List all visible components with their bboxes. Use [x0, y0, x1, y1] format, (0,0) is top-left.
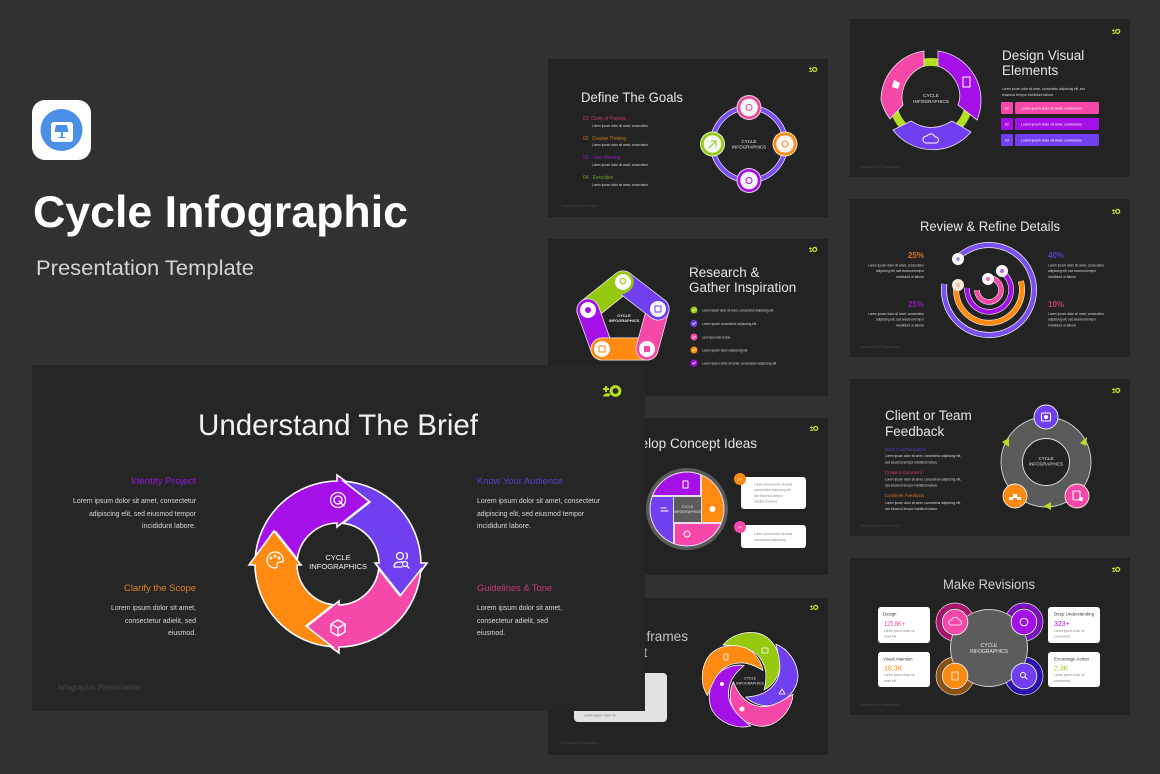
segmented ring	[881, 51, 981, 150]
list of four goals: Creative Thinking	[592, 136, 626, 142]
card: Design: amet elit	[884, 634, 896, 638]
heading: & Layout	[594, 645, 648, 660]
ring icons and label	[892, 77, 970, 143]
card: Encourage Action: Lorem ipsum dolor sit	[1054, 673, 1085, 677]
text block: Identity Project: Identity Project	[131, 476, 196, 487]
list of four goals: Execution	[593, 175, 613, 181]
heading: Design Visual	[1002, 48, 1084, 63]
feedback list: sed eiusmod tempor incididunt labore.	[885, 507, 938, 511]
stat: 25% purple: Lorem ipsum dolor sit amet, consectetur	[868, 312, 925, 316]
three coloured rows: 02	[1005, 122, 1009, 126]
card: Deep Understanding: consectetur	[1054, 634, 1071, 638]
card: Deep Understanding: 323+	[1054, 621, 1070, 628]
heading: Feedback	[885, 424, 945, 439]
card: Visual Attention: amet elit	[884, 679, 896, 683]
list of four goals: 02	[583, 136, 589, 142]
stat: 25% purple	[868, 300, 925, 328]
pentagon cycle	[588, 282, 658, 349]
feedback list: Create a Document	[885, 470, 923, 475]
paragraph	[1002, 87, 1085, 97]
feedback list: sed eiusmod tempor incididunt labore.	[885, 484, 938, 488]
card: Deep Understanding: Lorem ipsum dolor sit	[1054, 629, 1085, 633]
paragraph: Lorem ipsum dolor sit amet, consectetur adipiscing elit, sed	[1002, 87, 1085, 91]
text block: Know Your Audience: Lorem ipsum dolor sit amet, consectetur	[477, 496, 600, 505]
card 01: incididunt labore	[754, 500, 777, 504]
text block: Clarify the Scope: Clarify the Scope	[124, 583, 196, 594]
ring icons and label: CYCLE	[923, 93, 939, 98]
donut diagram: CYCLE	[1038, 456, 1054, 461]
icon: palette	[267, 552, 283, 568]
pinwheel circle: CYCLE	[682, 505, 694, 509]
feedback list: Work Communication	[885, 447, 926, 452]
panel: Client or Team Feedback	[850, 379, 1130, 536]
heading: Elements	[1002, 63, 1059, 78]
pinwheel circle: INFOGRAPHICS	[674, 510, 701, 514]
stat: 40% violet: incididunt ut labore	[1048, 275, 1076, 279]
concentric arcs	[944, 245, 1034, 335]
logo	[603, 386, 620, 396]
text block: Guidelines & Tone: eiusmod.	[477, 628, 505, 637]
arc nodes	[952, 253, 1008, 291]
stat: 25% purple: adipiscing elit, sed eiusmod tempor	[876, 318, 925, 322]
heading: Gather Inspiration	[689, 280, 796, 295]
text block: Identity Project: incididunt labore.	[142, 521, 196, 530]
text block: Clarify the Scope: eiusmod.	[168, 628, 196, 637]
paragraph: eiusmod tempor incididunt labore.	[1002, 93, 1054, 97]
list of four goals: Lorem ipsum dolor sit amet, consectetur	[592, 124, 649, 128]
heading: Develop Concept Ideas	[617, 436, 757, 451]
panel: Develop Concept Ideas	[645, 418, 828, 575]
heading: Make Revisions	[943, 577, 1035, 592]
text block: Identity Project: adipiscing elit, sed eiusmod tempor	[89, 509, 196, 518]
hub diagram: INFOGRAPHICS	[970, 649, 1009, 655]
three coloured rows: Lorem ipsum dolor sit amet, consectetur	[1021, 106, 1083, 110]
card: Design: Design	[883, 612, 897, 616]
text block: Guidelines & Tone: consectetur adielit, sed	[477, 616, 548, 625]
list of four goals	[583, 116, 649, 187]
card 01: consectetur adipiscing elit	[754, 488, 791, 492]
list of four goals: Clarity of Purpose	[591, 116, 626, 122]
heading: Understand The Brief: Understand The Brief	[198, 409, 479, 442]
panel: Define The Goals	[548, 59, 828, 217]
main title: Cycle Infographic	[33, 188, 408, 237]
swirl of five crescents	[696, 632, 805, 738]
card: Visual Attention: Lorem ipsum dolor sit	[884, 673, 915, 677]
footer: Infographic Presentation	[58, 683, 141, 692]
heading: Sketch Wire	[560, 629, 633, 644]
text block: Clarify the Scope	[111, 583, 196, 637]
text block: Guidelines & Tone: Lorem ipsum dolor sit amet,	[477, 603, 562, 612]
panel: Make Revisions	[850, 558, 1130, 715]
text block: Know Your Audience	[477, 476, 600, 530]
swirl icons and label: INFOGRAPHICS	[736, 682, 764, 686]
card 02	[734, 521, 806, 548]
text block: Guidelines & Tone	[477, 583, 562, 637]
pinwheel circle	[646, 468, 728, 550]
hub diagram	[936, 603, 1043, 695]
card 02: 04	[738, 526, 742, 530]
stat: 25% purple: incididunt ut labore	[896, 324, 924, 328]
heading: frames	[646, 629, 688, 644]
card 01	[734, 473, 806, 509]
card: Encourage Action	[1048, 652, 1100, 687]
footer: Infographic Presentation	[861, 345, 899, 349]
text block: Know Your Audience: incididunt labore.	[477, 521, 531, 530]
heading: Define The Goals: Define The Goals	[581, 90, 683, 105]
card: Deep Understanding: Deep Understanding	[1054, 612, 1095, 616]
footer: Infographic Presentation	[861, 703, 899, 707]
card 01: Lorem ipsum dolor sit amet	[754, 482, 793, 486]
card: Design	[878, 607, 930, 643]
three coloured rows: 01	[1005, 106, 1009, 110]
stat: 40% violet: Lorem ipsum dolor sit amet, consectetur	[1048, 264, 1105, 268]
card: Encourage Action: consectetur	[1054, 679, 1071, 683]
checklist: Lorem ipsum dolor sit amet, consectetur adipiscing elit.	[702, 308, 774, 312]
stat: 10% pink: adipiscing elit, sed eiusmod tempor	[1048, 318, 1097, 322]
stat: 40% violet: adipiscing elit, sed eiusmod tempor	[1048, 269, 1097, 273]
panel: Research & Gather Inspiration: CYCLE	[617, 313, 631, 318]
panel: Research & Gather Inspiration: INFOGRAPHICS	[609, 318, 640, 323]
centre label: CYCLE	[325, 553, 351, 562]
checklist: Lorem ipsum dolor adipiscing elit.	[702, 348, 748, 352]
text block: Clarify the Scope: consectetur adielit, sed	[125, 616, 196, 625]
card: Visual Attention: Visual Attention	[883, 656, 913, 662]
donut diagram: INFOGRAPHICS	[1029, 462, 1063, 466]
list of four goals: 04	[583, 175, 589, 181]
text block: Know Your Audience: Know Your Audience	[477, 476, 563, 487]
card: Encourage Action: Encourage Action	[1054, 656, 1090, 662]
feedback list: Customer Feedback	[885, 493, 925, 498]
three coloured rows: Lorem ipsum dolor sit amet, consectetur	[1021, 122, 1083, 126]
card 02: Lorem ipsum dolor sit amet	[754, 532, 793, 536]
checklist: Lorem ipsum consectetur adipiscing elit.	[702, 322, 757, 326]
checklist	[690, 306, 777, 366]
stat: 25% orange: Lorem ipsum dolor sit amet, consectetur	[868, 264, 925, 268]
panel: Review & Refine Details	[850, 199, 1130, 357]
feedback list	[885, 447, 961, 511]
stat: 25% orange: incididunt ut labore	[896, 275, 924, 279]
pentagon node icons	[580, 274, 666, 357]
list of four goals: Lorem ipsum dolor sit amet, consectetur	[592, 163, 649, 167]
feedback list: Lorem ipsum dolor sit amet, consectetur adipiscing elit,	[885, 478, 961, 482]
panel: Design Visual Elements	[850, 19, 1130, 177]
heading: Review & Refine Details	[920, 219, 1060, 234]
subtitle: Presentation Template	[36, 256, 254, 280]
card: Design: 125.8K+	[884, 621, 905, 628]
ring diagram with four nodes	[700, 95, 798, 193]
card: Visual Attention	[878, 652, 930, 687]
card: Visual Attention: 18.3K	[884, 666, 903, 672]
text block: Clarify the Scope: Lorem ipsum dolor sit amet,	[111, 603, 196, 612]
heading: Research &	[689, 265, 760, 280]
list of four goals: Lorem ipsum dolor sit amet, consectetur	[592, 183, 649, 187]
footer: Infographic Presentation	[861, 165, 899, 169]
donut diagram	[1001, 405, 1091, 510]
stat: 25% orange: adipiscing elit, sed eiusmod tempor	[876, 269, 925, 273]
panel: Wireframes	[548, 598, 828, 755]
centre label: INFOGRAPHICS	[309, 562, 367, 571]
icon: target	[330, 492, 346, 508]
ring diagram with four nodes: INFOGRAPHICS	[732, 144, 766, 150]
stat: 10% pink: incididunt ut labore	[1048, 324, 1076, 328]
list of four goals: User Meeting	[593, 155, 620, 161]
checklist: Lorem ipsum dolor sit amet, consectetur adipiscing elit.	[702, 362, 777, 366]
cycle of four arrows	[249, 475, 427, 653]
three coloured rows: Lorem ipsum dolor sit amet, consectetur	[1021, 138, 1083, 142]
hub diagram: CYCLE	[981, 643, 998, 649]
text block: Know Your Audience: adipiscing elit, sed eiusmod tempor	[477, 509, 584, 518]
feedback list: Lorem ipsum dolor sit amet, consectetur adipiscing elit,	[885, 454, 961, 458]
ring icons and label: INFOGRAPHICS	[913, 99, 949, 104]
ring diagram with four nodes: CYCLE	[741, 139, 757, 144]
app icon: Keynote	[32, 100, 91, 160]
white card: Lorem ipsum dolor sit	[584, 714, 616, 718]
text block: Guidelines & Tone: Guidelines & Tone	[477, 583, 552, 594]
swirl icons and label: CYCLE	[744, 676, 757, 680]
stat: 25% orange	[868, 251, 925, 279]
panel: Research & Gather Inspiration	[548, 239, 828, 396]
three coloured rows: 03	[1005, 138, 1009, 142]
heading: Client or Team	[885, 408, 972, 423]
swirl icons and label	[720, 648, 785, 712]
card: Deep Understanding	[1048, 607, 1100, 643]
stat: 10% pink	[1048, 300, 1105, 328]
footer: Infographic Presentation	[561, 204, 599, 208]
feedback list: sed eiusmod tempor incididunt labore.	[885, 460, 938, 464]
card 01: 03	[738, 478, 742, 482]
card 01: sed eiusmod tempor	[754, 494, 784, 498]
feedback list: Lorem ipsum dolor sit amet, consectetur adipiscing elit,	[885, 501, 961, 505]
footer: Infographic Presentation	[561, 741, 599, 745]
stat: 10% pink: Lorem ipsum dolor sit amet, consectetur	[1048, 312, 1105, 316]
stat: 40% violet	[1048, 251, 1105, 279]
stat: 40% violet: 40%	[1048, 251, 1064, 260]
stat: 25% purple: 25%	[908, 300, 924, 309]
icon: cube	[331, 620, 345, 636]
panel: Understand The Brief (main slide)	[32, 365, 645, 711]
list of four goals: 01	[583, 116, 589, 122]
stat: 10% pink: 10%	[1048, 300, 1064, 309]
text block: Identity Project: Lorem ipsum dolor sit amet, consectetur	[73, 496, 196, 505]
card: Encourage Action: 2.3K	[1054, 666, 1069, 672]
list of four goals: 03	[583, 155, 589, 161]
card: Design: Lorem ipsum dolor sit	[884, 629, 915, 633]
footer: Infographic Presentation	[861, 524, 899, 528]
checklist: Lorem ipsum dolor sit amet.	[702, 336, 731, 340]
three coloured rows	[1001, 102, 1099, 146]
card 02: consectetur adipiscing	[754, 538, 786, 542]
white card	[574, 673, 667, 722]
text block: Identity Project	[73, 476, 196, 530]
icon: audience search	[394, 552, 409, 568]
list of four goals: Lorem ipsum dolor sit amet, consectetur	[592, 143, 649, 147]
stat: 25% orange: 25%	[908, 251, 924, 260]
